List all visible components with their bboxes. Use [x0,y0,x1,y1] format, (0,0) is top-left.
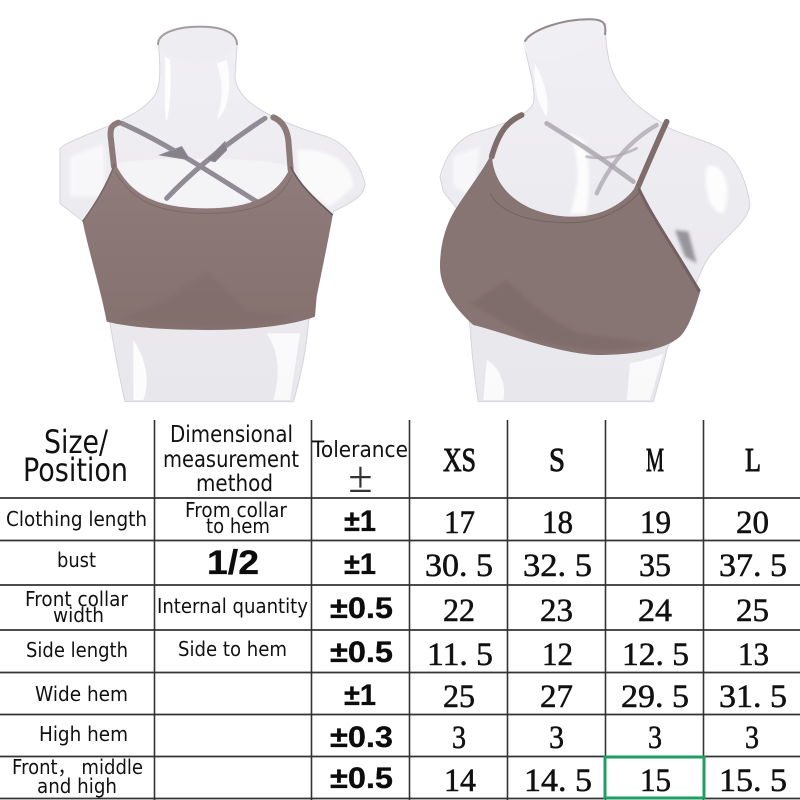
header row: ± [348,453,373,502]
row: bust: bust [57,548,96,572]
row: front, middle and high: 14. 5 [524,763,592,799]
row: front, middle and high: and high [37,774,117,798]
table grid [0,420,800,800]
header row [23,422,761,502]
row: bust [57,544,787,584]
row: wide hem: 29. 5 [621,679,689,715]
back straps crossing [547,123,657,193]
neckline trim [490,188,699,292]
row: side length: 12. 5 [622,637,689,673]
row: front collar width: 24 [638,593,672,629]
row: wide hem: ±1 [344,679,376,712]
neckline trim [83,163,333,222]
row: high hem: 3 [648,720,662,756]
row: side length: 12 [542,637,573,673]
row: bust: 37. 5 [719,548,787,584]
header row: L [745,442,761,479]
row: front collar width: 22 [443,593,475,629]
row: bust: ±1 [344,548,376,581]
mannequin torso three-quarter [440,23,750,402]
row: clothing length: to hem [206,514,270,538]
header row: Position [23,451,128,489]
row: front, middle and high: 14 [444,763,476,799]
row: side length [26,636,769,673]
ribbed panel [120,272,293,326]
header row: S [549,442,565,479]
row: side length: 11. 5 [427,637,493,673]
row: clothing length: From collar [185,498,288,522]
front straps [111,117,291,170]
row: front collar width [25,587,769,629]
neck rim [158,27,237,45]
row: clothing length: 20 [736,505,769,541]
row: high hem: 3 [452,720,466,756]
header row: measurement [163,447,299,473]
row: front collar width: 25 [736,593,769,629]
row: bust: 35 [639,548,671,584]
row: wide hem: 27 [540,679,573,715]
row: clothing length: ±1 [344,505,376,538]
neck opening [524,19,606,60]
row: clothing length: 18 [542,505,573,541]
row: clothing length: 19 [640,505,671,541]
bra body [83,163,333,330]
header row: Size/ [44,423,108,461]
row: side length: 13 [738,637,769,673]
header row: method [196,471,273,497]
bra body [440,153,701,355]
row: front collar width: Internal quantity [157,594,308,618]
row: bust: 32. 5 [523,548,592,584]
header row: XS [443,442,476,479]
row: front collar width: 23 [540,593,573,629]
header row: M [646,442,664,479]
row: side length: ±0.5 [330,636,393,669]
row: high hem: 3 [549,720,564,756]
photo: three-quarter view of bra on mannequin [440,19,750,402]
row: wide hem: 25 [443,679,475,715]
mannequin torso front [60,42,365,402]
row: high hem [39,720,759,756]
neck rim [525,19,605,42]
row: clothing length: Clothing length [6,507,147,531]
row: high hem: High hem [39,722,128,746]
front straps [492,115,667,190]
row: front, middle and high: 15. 5 [719,763,787,799]
row: bust: 30. 5 [425,548,493,584]
row: high hem: 3 [745,720,759,756]
row: wide hem: Wide hem [35,682,128,706]
row: side length: Side to hem [178,637,287,661]
row: side length: Side length [26,638,128,662]
ribbed panel [470,280,657,350]
row: bust: 1/2 [207,544,259,582]
row: clothing length: 17 [444,505,475,541]
photo: front view of bra on mannequin [60,27,365,402]
row: front collar width: ±0.5 [330,592,393,625]
neck opening [158,27,237,63]
row: clothing length [6,498,769,541]
row: front, middle and high: ±0.5 [330,762,393,795]
row: front, middle and high [12,755,787,799]
row: front collar width: Front collar [25,587,129,611]
row: front, middle and high: Front， middle [12,755,143,779]
header row: Tolerance [311,438,408,463]
row: wide hem: 31. 5 [719,679,787,715]
row: front, middle and high: 15 [640,763,671,799]
row: wide hem [35,679,787,715]
row: front collar width: width [53,603,104,627]
size table [0,420,800,800]
back straps crossing [122,118,265,202]
row: high hem: ±0.3 [330,721,393,754]
highlighted cell [605,757,704,798]
header row: Dimensional [170,422,293,448]
